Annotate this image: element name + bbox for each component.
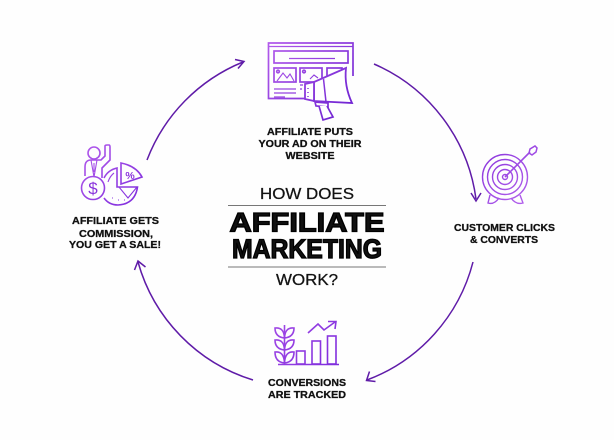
- icon: target with arrow: [482, 146, 537, 203]
- label: affiliate puts your ad: [258, 126, 362, 162]
- label: affiliate puts your ad: YOUR AD ON THEIR: [258, 138, 362, 150]
- label: affiliate gets commission: AFFILIATE GETS: [72, 215, 159, 227]
- title: AFFILIATE: [230, 208, 384, 238]
- label: customer clicks: [454, 222, 555, 246]
- title: WORK?: [276, 272, 338, 289]
- arrow: top-left arc: [147, 60, 244, 160]
- icon: website with megaphone: [268, 43, 353, 120]
- label: conversions tracked: ARE TRACKED: [268, 389, 346, 401]
- arrow: top-right arc: [374, 64, 481, 201]
- label: customer clicks: CUSTOMER CLICKS: [454, 222, 555, 234]
- arrow: bottom-right arc: [366, 262, 473, 382]
- icon: person with coin and pie chart: %: [125, 170, 135, 182]
- arrow: bottom-left arc: [134, 261, 253, 380]
- icon: person with coin and pie chart: [82, 145, 142, 205]
- label: conversions tracked: [268, 377, 346, 401]
- label: affiliate gets commission: [69, 215, 161, 251]
- label: affiliate puts your ad: WEBSITE: [286, 150, 334, 162]
- icon: plant and growth chart: [275, 322, 339, 364]
- title: HOW DOES: [260, 186, 354, 203]
- label: affiliate gets commission: YOU GET A SALE!: [69, 239, 161, 251]
- title: [228, 186, 386, 289]
- title: MARKETING: [232, 234, 382, 264]
- icon: person with coin and pie chart: $: [88, 179, 98, 198]
- label: affiliate gets commission: COMMISSION,: [79, 228, 153, 240]
- label: customer clicks: & CONVERTS: [470, 234, 538, 246]
- label: affiliate puts your ad: AFFILIATE PUTS: [267, 126, 353, 138]
- label: conversions tracked: CONVERSIONS: [268, 377, 346, 389]
